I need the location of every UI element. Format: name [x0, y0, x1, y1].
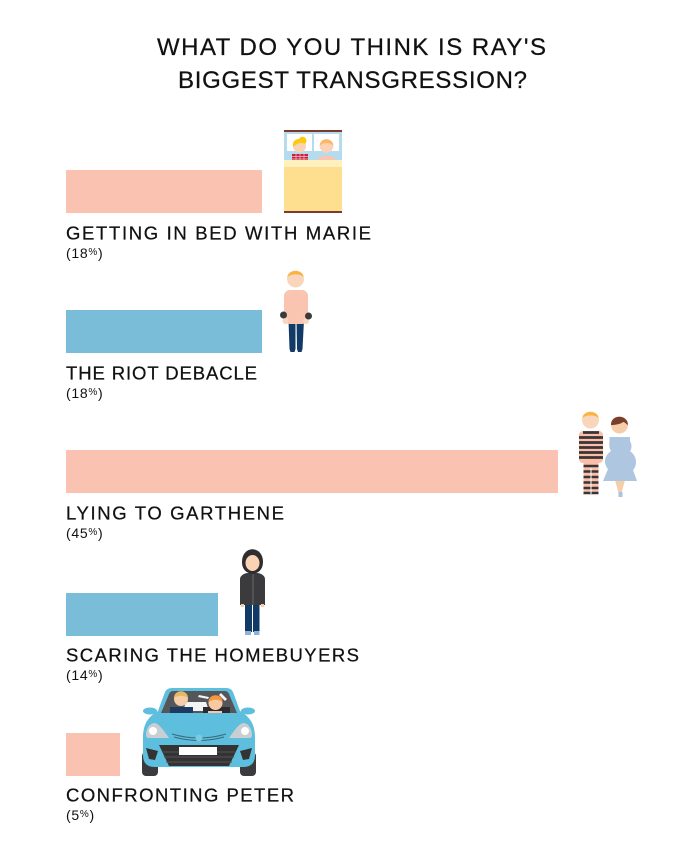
- figure: pregnant woman: [603, 416, 637, 497]
- label: THE RIOT DEBACLE: [66, 362, 257, 384]
- windscreen: [161, 691, 237, 713]
- percentage: (5: [66, 807, 80, 823]
- label: CONFRONTING PETER: [66, 784, 294, 806]
- panel: confronting Peter: [66, 688, 294, 823]
- percentage: ): [98, 667, 103, 683]
- icon: car: [142, 688, 256, 776]
- percentage: (18: [66, 245, 88, 261]
- percentage: (45: [66, 525, 88, 541]
- title: BIGGEST TRANSGRESSION?: [178, 67, 527, 94]
- percentage: ): [98, 385, 103, 401]
- percentage: %: [88, 247, 98, 258]
- panel: getting in bed with Marie: [66, 130, 371, 261]
- panel: lying to Garthene: [66, 412, 637, 541]
- panel: scaring the homebuyers: [66, 549, 359, 683]
- bar: 18%: [66, 170, 262, 213]
- wheels: [142, 752, 158, 776]
- percentage: %: [80, 809, 89, 820]
- percentage: (14: [66, 667, 88, 683]
- percentage: %: [88, 669, 98, 680]
- bar: 45%: [66, 450, 558, 493]
- bar: 18%: [66, 310, 262, 353]
- icon: man in hoodie: [240, 549, 265, 635]
- grille: [159, 745, 239, 766]
- percentage: %: [88, 387, 98, 398]
- icon: bed: [284, 130, 342, 213]
- percentage: ): [98, 525, 103, 541]
- label: SCARING THE HOMEBUYERS: [66, 644, 359, 666]
- percentage: (18: [66, 385, 88, 401]
- mirrors: [143, 708, 157, 714]
- title: [157, 34, 546, 94]
- label: LYING TO GARTHENE: [66, 502, 284, 524]
- number plate: [179, 747, 217, 755]
- percentage: ): [98, 245, 103, 261]
- bar: 5%: [66, 733, 120, 776]
- headlights: [146, 723, 169, 738]
- fog lights: [146, 748, 158, 760]
- bar: 14%: [66, 593, 218, 636]
- car body: [143, 688, 255, 767]
- label: GETTING IN BED WITH MARIE: [66, 222, 371, 244]
- title: WHAT DO YOU THINK IS RAY'S: [157, 34, 546, 61]
- occupants: [170, 707, 193, 713]
- stickers: [198, 693, 227, 701]
- percentage: %: [88, 527, 98, 538]
- icon: man with fists: [280, 270, 312, 352]
- percentage: ): [89, 807, 95, 823]
- icon: couple: [579, 412, 637, 497]
- panel: the riot debacle: [66, 270, 312, 401]
- figure: man in striped top: [579, 412, 603, 494]
